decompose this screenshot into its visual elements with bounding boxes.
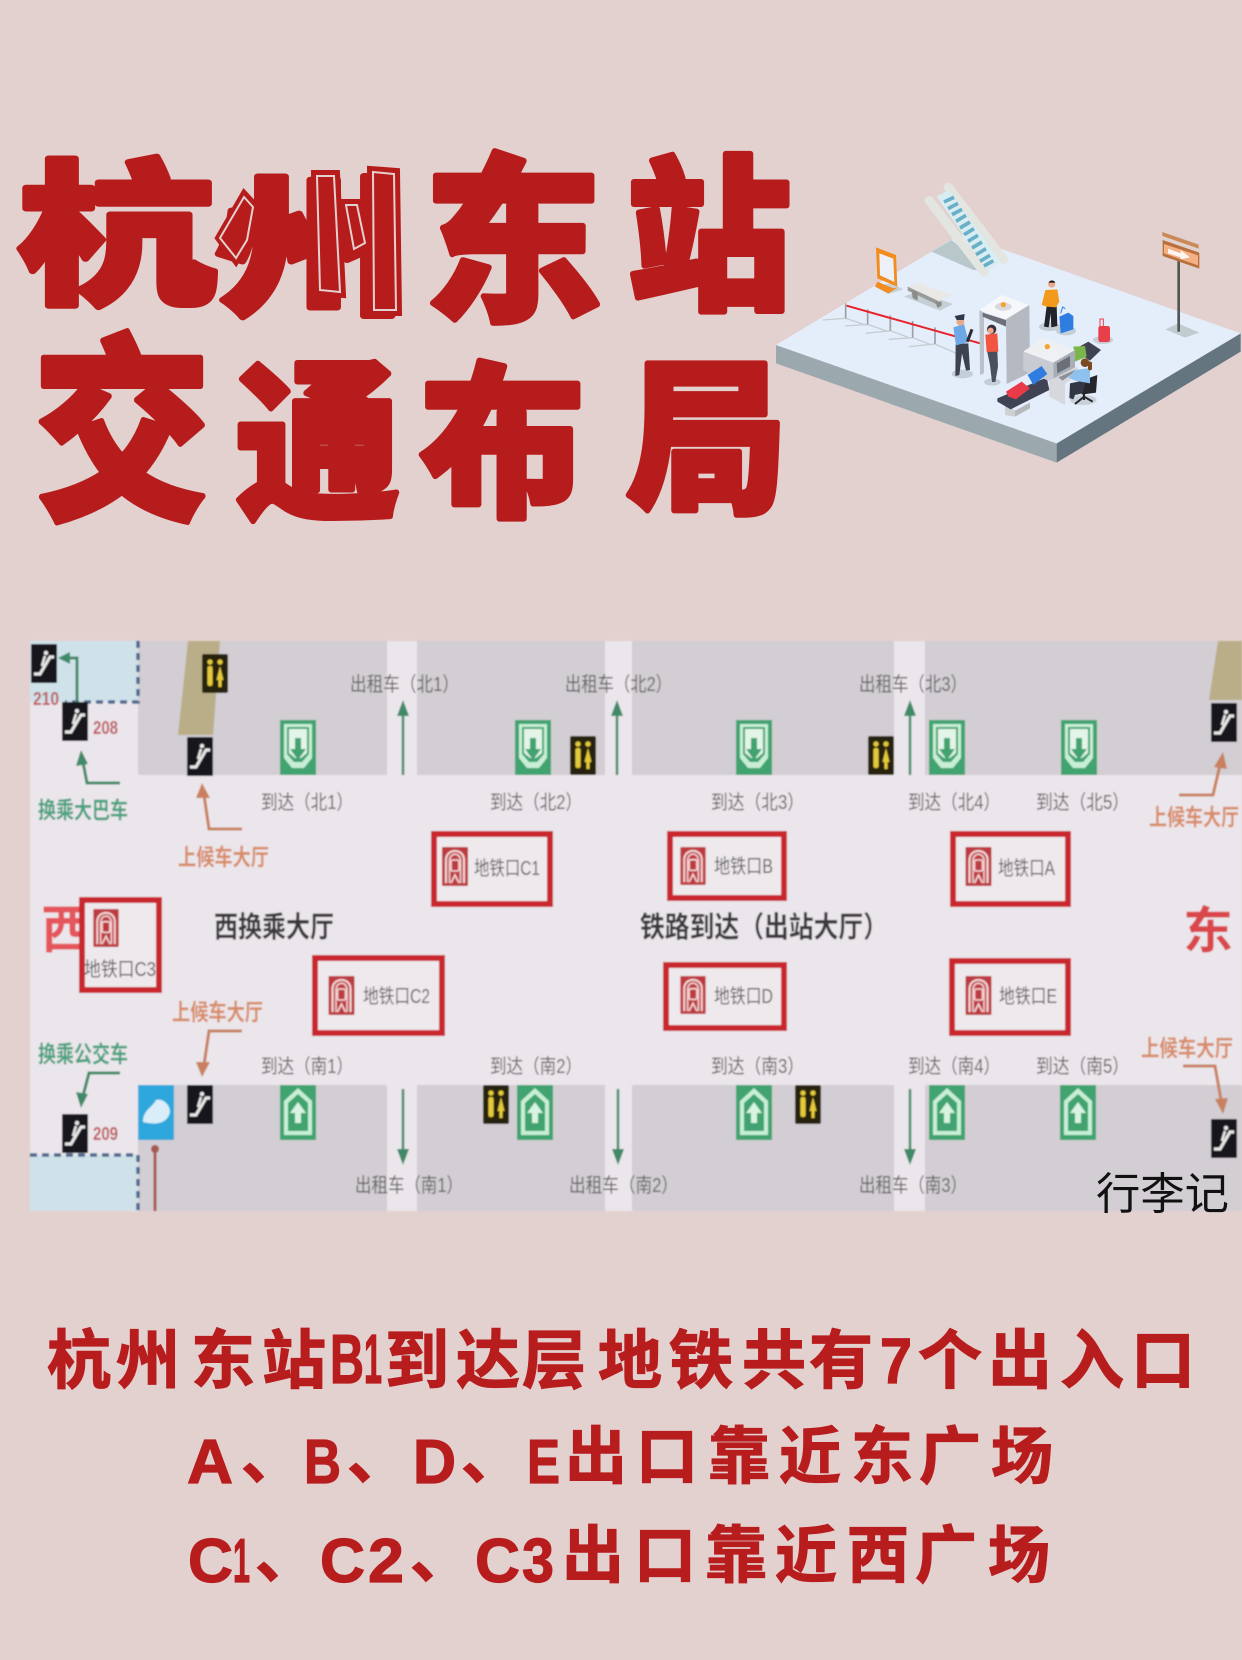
west label: 西 xyxy=(41,902,93,960)
orange waiting hall labels: 上候车大厅 xyxy=(178,844,269,870)
platform slab xyxy=(776,234,1241,463)
subway exit labels: 地铁口C1 xyxy=(474,857,540,880)
title: 州 xyxy=(216,129,406,347)
summary line 2: D xyxy=(413,1428,456,1497)
summary line 3: 、 xyxy=(255,1522,317,1591)
summary line 2: 、 xyxy=(461,1423,523,1492)
north arrival labels: 到达（北1） xyxy=(261,791,353,814)
subway exit boxes xyxy=(82,834,1068,1033)
south arrival labels: 到达（南4） xyxy=(908,1055,1000,1078)
subway icons xyxy=(93,847,992,1015)
summary line 3: 出口靠近西广场 xyxy=(562,1522,1050,1591)
summary line 3: C xyxy=(320,1527,365,1596)
north arrival labels xyxy=(261,791,1129,814)
north arrival labels: 到达（北5） xyxy=(1036,791,1129,814)
bench xyxy=(904,283,953,311)
direction signpost xyxy=(1162,232,1199,338)
summary line 1 xyxy=(47,1320,1195,1398)
operator on chair xyxy=(1068,358,1097,405)
title: 通 xyxy=(236,305,400,555)
blue service box xyxy=(138,1085,174,1140)
south arrival labels: 到达（南5） xyxy=(1036,1055,1129,1078)
west blue zones xyxy=(30,641,138,1211)
dashed zone borders xyxy=(30,641,138,1211)
rope barrier xyxy=(823,303,980,353)
brown upward arrow xyxy=(151,1145,159,1211)
red suitcase xyxy=(1093,319,1113,344)
summary line 1: 到达层地铁共有 xyxy=(385,1325,873,1397)
south arrival labels: 到达（南3） xyxy=(711,1055,804,1078)
north taxi labels xyxy=(350,673,967,696)
arrival exit icons south xyxy=(280,1085,1096,1140)
escalator numbers: 210 xyxy=(33,689,59,709)
toilet icons xyxy=(202,654,894,1124)
south arrival labels: 到达（南1） xyxy=(261,1055,353,1078)
escalator xyxy=(929,187,1003,272)
arrival exit icons north xyxy=(280,720,1097,775)
north arrival labels: 到达（北2） xyxy=(490,791,582,814)
title: 东 xyxy=(424,98,602,359)
summary line 2: 、 xyxy=(241,1423,303,1492)
summary line 2: 出口靠近东广场 xyxy=(565,1423,1053,1492)
south taxi labels: 出租车（南1） xyxy=(355,1174,463,1197)
hall names xyxy=(214,911,888,944)
hall names: 铁路到达（出站大厅） xyxy=(640,911,888,944)
title: 布 xyxy=(420,310,585,551)
escalator numbers: 209 xyxy=(93,1124,118,1144)
taxi arrows north xyxy=(397,700,916,775)
north arrival labels: 到达（北4） xyxy=(908,791,1000,814)
summary line 3: C xyxy=(475,1527,520,1596)
south taxi labels: 出租车（南2） xyxy=(569,1174,678,1197)
green transfer labels: 换乘公交车 xyxy=(38,1041,128,1067)
summary line 2: A xyxy=(187,1428,233,1497)
title: 交 xyxy=(34,274,210,562)
green transfer labels xyxy=(38,797,128,1067)
orange info stand xyxy=(875,247,903,294)
summary line 3: C xyxy=(188,1527,233,1596)
subway exit labels: 地铁口E xyxy=(999,985,1057,1008)
title: 杭 xyxy=(18,111,216,336)
summary line 2: B xyxy=(304,1428,341,1497)
summary line 2: E xyxy=(527,1428,560,1497)
hall names: 西换乘大厅 xyxy=(214,911,334,944)
x-ray machine and conveyor xyxy=(997,338,1101,417)
hollow stroke accents on 州 xyxy=(218,169,399,313)
subway exit labels: 地铁口C3 xyxy=(84,958,156,981)
illustration: isometric station security platform xyxy=(776,187,1241,463)
summary line 1: 杭州东站 xyxy=(47,1325,326,1397)
summary line 1: B xyxy=(330,1320,364,1398)
subway exit labels: 地铁口A xyxy=(998,857,1056,880)
escalator icons xyxy=(31,644,1237,1158)
walking woman xyxy=(984,325,1001,386)
subway exit labels: 地铁口B xyxy=(714,855,773,878)
subway exit labels: 地铁口D xyxy=(714,985,773,1008)
taxi lanes xyxy=(387,641,925,1211)
green transfer labels: 换乘大巴车 xyxy=(38,797,128,823)
north taxi labels: 出租车（北2） xyxy=(565,673,672,696)
summary line 3: 、 xyxy=(410,1522,472,1591)
summary line 3 xyxy=(188,1522,1050,1596)
title: 站 xyxy=(627,103,791,344)
subway exit labels: 地铁口C2 xyxy=(363,985,430,1008)
guard xyxy=(952,314,973,378)
summary line 1: 7 xyxy=(880,1325,912,1397)
summary line 3: 2 xyxy=(368,1527,404,1596)
orange arrow heads xyxy=(196,752,1228,1114)
green transfer arrows xyxy=(66,658,120,1096)
traveller with blue suitcase xyxy=(1039,280,1076,335)
orange waiting hall labels xyxy=(172,804,1239,1061)
south taxi labels: 出租车（南3） xyxy=(859,1174,967,1197)
metro map panel xyxy=(30,641,1242,1219)
hall floor xyxy=(30,641,1242,1211)
subway exit labels xyxy=(84,855,1057,1008)
summary line 1: 个出入口 xyxy=(918,1325,1195,1397)
north taxi labels: 出租车（北3） xyxy=(859,673,967,696)
watermark: 行李记 xyxy=(1096,1170,1229,1219)
summary line 3: 3 xyxy=(522,1527,554,1596)
summary line 3: 1 xyxy=(233,1527,250,1596)
south arrival labels xyxy=(261,1055,1129,1078)
north gray band xyxy=(138,641,1242,775)
north arrival labels: 到达（北3） xyxy=(711,791,804,814)
taxi arrows south xyxy=(397,1089,916,1165)
north taxi labels: 出租车（北1） xyxy=(350,673,459,696)
tan passage strips xyxy=(178,641,1242,735)
south arrival labels: 到达（南2） xyxy=(490,1055,582,1078)
south taxi labels xyxy=(355,1174,967,1197)
east label: 东 xyxy=(1183,903,1233,959)
green arrow heads xyxy=(58,652,88,1108)
security gate xyxy=(979,295,1030,384)
summary line 1: 1 xyxy=(364,1320,382,1398)
escalator numbers xyxy=(33,689,118,1144)
summary line 2 xyxy=(187,1423,1053,1497)
title: 局 xyxy=(626,306,787,548)
orange waiting hall labels: 上候车大厅 xyxy=(172,999,263,1025)
escalator numbers: 208 xyxy=(93,718,118,738)
orange arrows xyxy=(204,765,1221,1100)
south gray band xyxy=(138,1085,1242,1211)
summary line 2: 、 xyxy=(347,1423,409,1492)
title xyxy=(18,98,791,562)
